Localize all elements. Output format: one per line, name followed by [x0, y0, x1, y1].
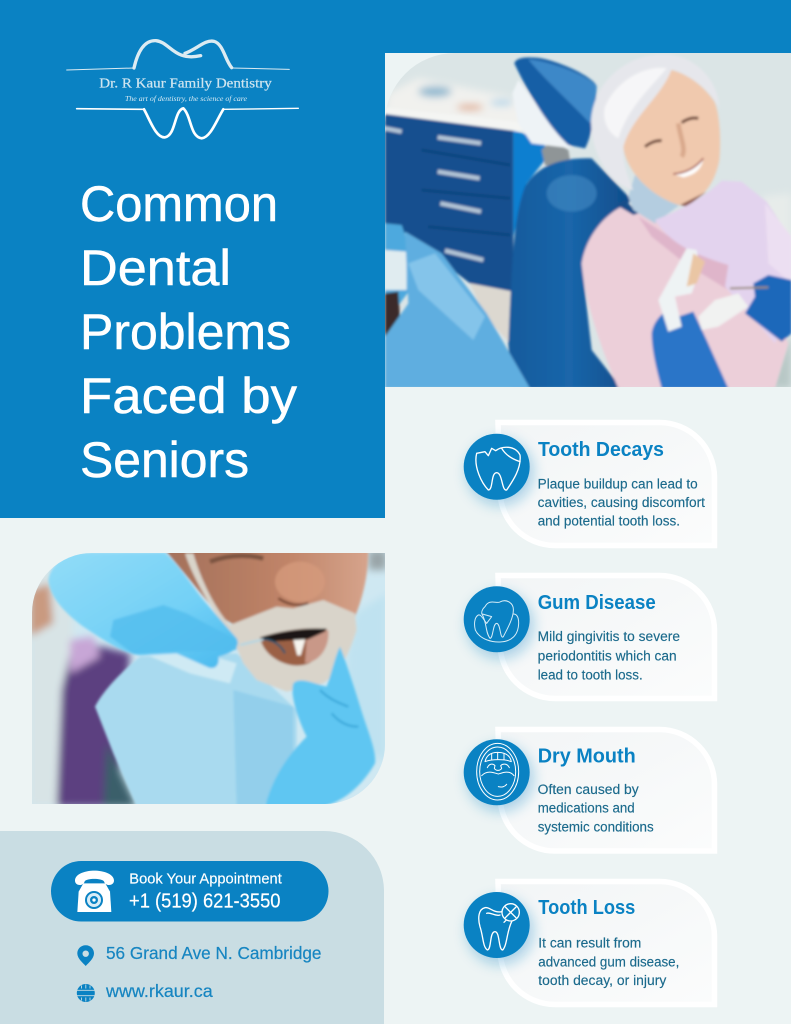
logo: Dr. R Kaur Family Dentistry — [67, 41, 298, 138]
logo: Dr. R Kaur Family Dentistry: The art of dentistry, the science of care — [125, 94, 248, 103]
bib — [655, 181, 791, 343]
icon: globe — [77, 984, 95, 1002]
panel: Tooth Loss: advanced gum disease, — [538, 955, 679, 970]
panel: Gum Disease: Mild gingivitis to severe — [538, 629, 680, 644]
title: Common — [80, 176, 278, 232]
website: www.rkaur.ca — [105, 981, 213, 1001]
panel: Tooth Loss: It can result from — [538, 935, 641, 950]
panel: Tooth Loss: Tooth Loss — [538, 897, 635, 919]
panel: Dry Mouth: Dry Mouth — [538, 745, 636, 767]
panel: Gum Disease: Gum Disease — [538, 592, 656, 614]
icon: tooth with cross mark — [479, 904, 519, 950]
blurred counter — [385, 78, 791, 388]
hair — [591, 54, 719, 190]
panel: Tooth Decays: cavities, causing discomfort — [538, 495, 705, 510]
call to action: book appointment: Book Your Appointment — [129, 871, 282, 887]
call to action: book appointment — [51, 861, 328, 922]
icon: gum and tooth — [475, 601, 519, 642]
title: Dental — [80, 240, 231, 296]
panel: Tooth Loss — [464, 882, 714, 1005]
panel: Dry Mouth — [464, 730, 714, 851]
panel: Dry Mouth: systemic conditions — [538, 819, 654, 834]
sweater — [582, 207, 788, 388]
panel: Tooth Decays — [464, 422, 714, 546]
panel: Tooth Decays: and potential tooth loss. — [538, 514, 680, 529]
panel: Gum Disease: periodontitis which can — [538, 649, 677, 664]
panel: Dry Mouth: medications and — [538, 801, 635, 816]
panel: Tooth Loss: tooth decay, or injury — [538, 973, 667, 988]
logo: Dr. R Kaur Family Dentistry: Dr. R Kaur Family Dentistry — [99, 76, 272, 90]
panel: Tooth Decays: Tooth Decays — [538, 439, 664, 461]
glove lower right — [265, 647, 375, 807]
panel: title background — [0, 0, 385, 518]
tooth model — [658, 248, 700, 332]
icon: open mouth — [477, 743, 519, 800]
title — [80, 176, 297, 488]
photo: senior woman in dental chair — [385, 50, 791, 390]
panel: Gum Disease — [464, 576, 714, 698]
drape — [95, 653, 297, 807]
face — [623, 70, 720, 205]
glove upper left — [48, 553, 238, 668]
face — [165, 550, 368, 630]
gloves — [652, 310, 728, 388]
panel: contact information — [0, 831, 384, 1024]
panel: Tooth Decays: Plaque buildup can lead to — [538, 476, 698, 491]
icon: decayed tooth — [476, 447, 520, 490]
title: Problems — [80, 304, 291, 360]
call to action: book appointment: +1 (519) 621-3550 — [129, 889, 280, 912]
top blue band — [0, 0, 791, 53]
mouth — [260, 628, 327, 666]
panel: Dry Mouth: Often caused by — [538, 782, 639, 797]
title: Seniors — [80, 432, 249, 488]
address: 56 Grand Ave N. Cambridge — [106, 943, 322, 963]
collar — [617, 200, 638, 215]
photo: dentist examining senior man — [30, 550, 387, 807]
title: Faced by — [80, 368, 297, 424]
icon: location pin — [77, 945, 94, 966]
beard — [185, 553, 357, 692]
panel: Gum Disease: lead to tooth loss. — [538, 667, 643, 682]
icon: telephone — [75, 871, 114, 912]
